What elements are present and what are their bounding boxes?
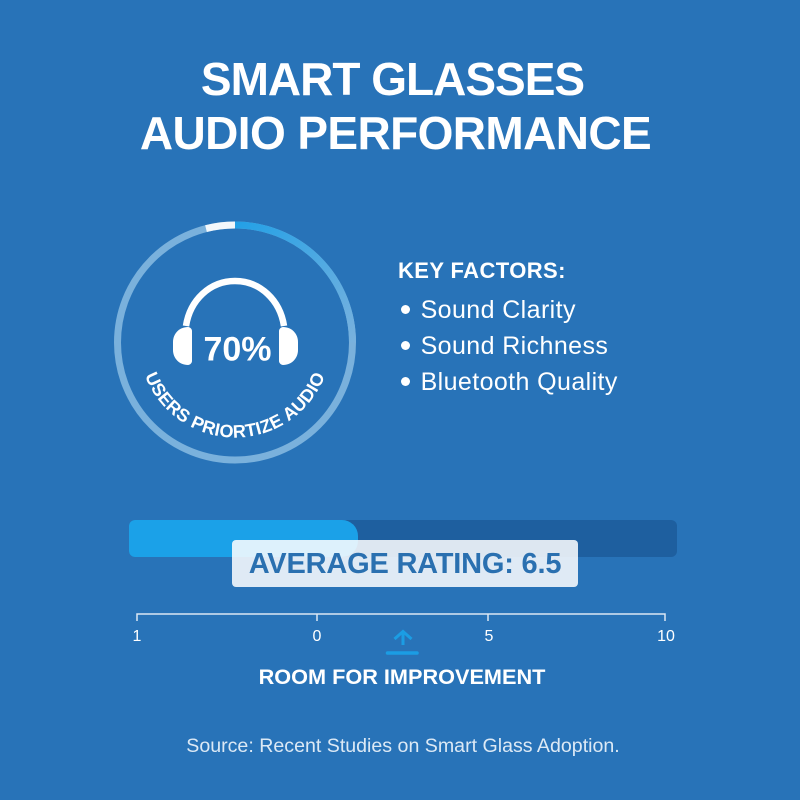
room for improvement label: ROOM FOR IMPROVEMENT <box>259 664 545 689</box>
scale axis <box>137 614 665 621</box>
scale labels <box>133 628 675 645</box>
rating badge <box>232 540 578 587</box>
factor: sound richness: Sound Richness <box>421 332 608 360</box>
factor: sound clarity: Sound Clarity <box>421 296 576 324</box>
scale labels: 0 <box>313 628 322 645</box>
icon: headphones <box>173 281 298 365</box>
scale labels: 5 <box>485 628 494 645</box>
scale labels: 10 <box>657 628 675 645</box>
gauge ring track <box>118 225 352 460</box>
rating bar track <box>129 520 677 557</box>
curved caption: USERS PRIORTIZE AUDIO <box>146 372 324 438</box>
source note: Source: Recent Studies on Smart Glass Adoption. <box>186 735 620 757</box>
rating badge: AVERAGE RATING: 6.5 <box>249 548 561 580</box>
title: AUDIO PERFORMANCE <box>140 107 651 159</box>
gauge blue arc <box>235 225 352 342</box>
rating bar fill <box>129 520 358 557</box>
icon: up arrow <box>388 632 417 653</box>
title <box>140 53 651 159</box>
scale labels: 1 <box>133 628 142 645</box>
key factors list <box>401 296 618 396</box>
factor: bluetooth quality: Bluetooth Quality <box>421 368 618 396</box>
gauge white arc <box>206 225 235 229</box>
percentage value: 70% <box>203 330 272 368</box>
title: SMART GLASSES <box>201 53 584 105</box>
key factors heading: KEY FACTORS: <box>398 258 566 283</box>
